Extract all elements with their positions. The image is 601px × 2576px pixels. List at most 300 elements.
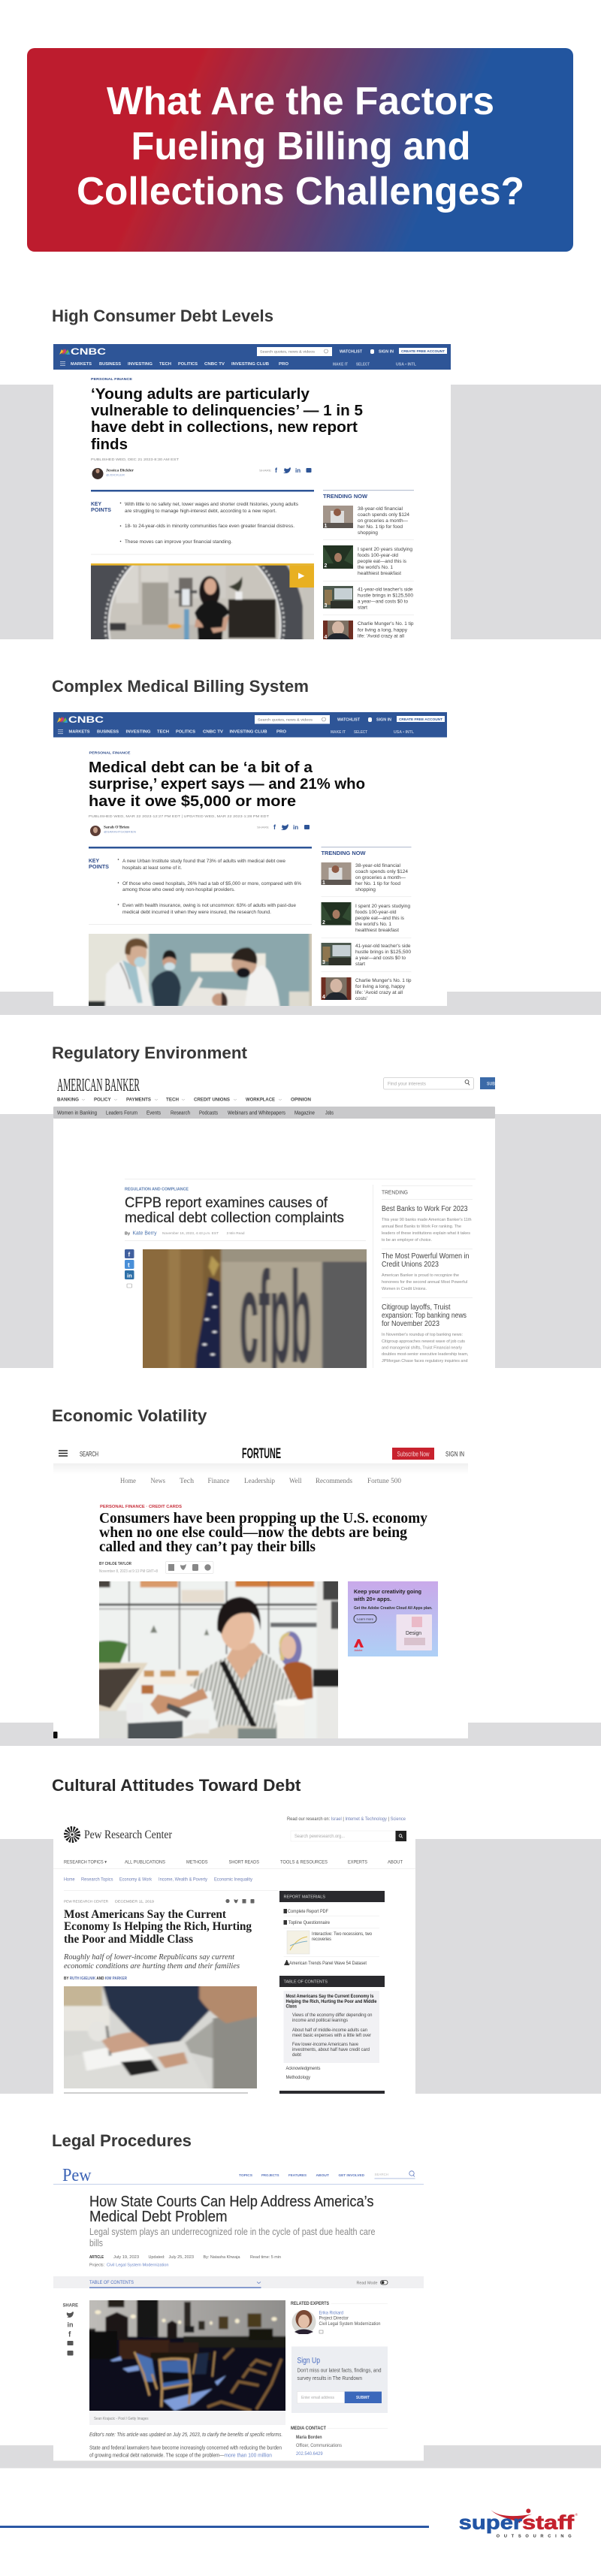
trending item 1: leaders of these institutions explain what it takes (382, 1231, 470, 1236)
trending headlines: 38-year-old financial (355, 863, 401, 868)
CNBC header bar: TECH (157, 730, 169, 735)
secondary navigation bar: Leaders Forum (106, 1110, 137, 1116)
publication date: PUBLISHED WED, MAR 22 2023·12:27 PM EDT | UPDATED WED, MAR 22 2023·1:28 PM EDT (89, 814, 270, 818)
navigation: SEARCH (374, 2173, 388, 2177)
social share buttons: in (127, 1273, 132, 1279)
sidebar: table of contents: meet basic expenses with a little left over (292, 2034, 371, 2038)
panel: American Banker article screenshot (53, 1074, 496, 1390)
trending headlines: for living a long, happy (355, 984, 406, 989)
trending thumbnails: 1 (322, 880, 325, 886)
article headline: How State Courts Can Help Address America’s (89, 2194, 374, 2210)
trending item 2: The Most Powerful Women in (382, 1252, 470, 1261)
category label: PERSONAL FINANCE (91, 377, 132, 381)
trending headlines: 41-year-old teacher's side (355, 944, 411, 949)
photo caption (89, 2411, 285, 2425)
share icons: SHARE (257, 825, 269, 829)
sidebar: table of contents: Helping the Rich, Hurting the Poor and Middle (285, 2000, 377, 2004)
Fortune navigation (120, 1477, 402, 1484)
trending headlines: Charlie Munger's No. 1 tip (358, 621, 414, 627)
Fortune top bar: SEARCH (80, 1450, 98, 1457)
trending headlines: the world's No. 1 (355, 922, 391, 927)
article meta: Civil Legal System Modernization (107, 2263, 168, 2267)
secondary navigation bar: Magazine (294, 1110, 315, 1116)
Fortune navigation: Fortune 500 (367, 1477, 402, 1484)
trending headlines: shopping (358, 530, 378, 536)
Fortune top bar: Subscribe Now (397, 1450, 430, 1457)
article headline: Medical Debt Problem (89, 2209, 227, 2225)
article meta: Updated: (149, 2255, 165, 2260)
CNBC header bar: CREATE FREE ACCOUNT (399, 717, 442, 721)
article subheading: bills (89, 2238, 103, 2248)
publication date: PUBLISHED WED, DEC 21 2023·8:30 AM EST (91, 458, 180, 461)
interactive thumbnail (287, 1931, 310, 1954)
trending headlines: hustle brings in $125,500 (358, 593, 413, 598)
panel: CNBC medical debt article screenshot (53, 712, 447, 1014)
key points: are struggling to manage high-interest debt, according to a new report. (125, 509, 276, 514)
trending thumbnails: 4 (325, 635, 328, 640)
article meta: PEW RESEARCH CENTER (64, 1899, 109, 1904)
trending item 2: honorees for the second annual Most Powerful (382, 1280, 467, 1285)
primary navigation: BANKING (57, 1097, 79, 1103)
heading: regulatory environment: Regulatory Environment (52, 1043, 248, 1062)
gray band 2 (0, 992, 601, 1015)
trending item 3: Citigroup approaches newest wave of job cuts (382, 1339, 465, 1344)
logo: SuperStaff Outsourcing: super (459, 2511, 522, 2534)
key points: medical debt incurred it when they were insured, the research found. (122, 910, 271, 915)
navigation: GET INVOLVED (338, 2173, 365, 2178)
trending headlines: the world's No. 1 (358, 565, 393, 570)
sidebar: report materials: American Trends Panel Wave 54 Dataset (289, 1961, 367, 1966)
author byline: Sarah O'Brien (104, 826, 129, 829)
secondary navigation bar: Women in Banking (57, 1110, 97, 1116)
sidebar: table of contents: debt (292, 2053, 301, 2058)
main navigation: EXPERTS (348, 1860, 368, 1865)
subscribe button (480, 1077, 496, 1089)
byline: 3 Min Read (227, 1231, 245, 1236)
key points: Of those who owed hospitals, 26% had a tab of $5,000 or more, compared with 6% (122, 881, 302, 886)
article body text: Editor's note: This article was updated on July 25, 2023, to clarify the benefits of specific reforms. (89, 2433, 282, 2438)
related experts: Erika Rickard (319, 2311, 343, 2315)
Fortune navigation: News (150, 1477, 165, 1484)
media contact: MEDIA CONTACT (291, 2426, 326, 2431)
table of contents bar: TABLE OF CONTENTS (89, 2281, 134, 2285)
trending item 3 (382, 1303, 469, 1363)
CNBC header bar: MAKE IT (331, 730, 346, 735)
trending headlines: foods 100-year-old (355, 910, 397, 915)
sidebar: table of contents: About half of middle-income adults can (292, 2028, 367, 2033)
secondary navigation bar (53, 1107, 495, 1119)
Fortune top bar (53, 1446, 468, 1474)
secondary navigation bar: Events (146, 1110, 161, 1116)
CNBC header bar: CNBC TV (203, 730, 224, 735)
article body text: more than 100 million (224, 2454, 272, 2458)
main navigation (53, 1860, 415, 1869)
Fortune navigation: Finance (207, 1477, 230, 1484)
trending item 3: JPMorgan Chase faces regulatory inquiries and (382, 1359, 467, 1363)
search box: Find your interests (388, 1082, 426, 1086)
article body text: of growing medical debt nationwide. The scope of the problem— (89, 2454, 224, 2458)
navigation: FEATURES (288, 2173, 307, 2178)
CNBC header bar: CNBC (71, 346, 106, 357)
trending headlines: start (355, 962, 365, 967)
trending now sidebar (322, 850, 412, 1001)
share column: in (68, 2321, 74, 2329)
Fortune navigation: Well (289, 1477, 302, 1484)
navigation (53, 2171, 424, 2185)
share icons (165, 1561, 213, 1573)
article headline: called and they can’t pay their bills (99, 1539, 316, 1555)
article headline: when no one else could—now the debts are being (99, 1524, 407, 1541)
social share buttons (125, 1249, 134, 1288)
trending headlines: life: 'Avoid crazy at all (358, 634, 405, 639)
author byline: Jessica Dickler (106, 469, 134, 473)
navigation: TOPICS (239, 2173, 253, 2178)
CNBC header bar (53, 344, 451, 370)
article subheading: Roughly half of lower-income Republicans say current (63, 1952, 235, 1961)
key points divider bars (89, 847, 412, 925)
expert portrait (291, 2310, 316, 2334)
panel: CNBC young adults article screenshot (53, 344, 451, 723)
title banner (27, 48, 573, 252)
trending sidebar: TRENDING (382, 1188, 408, 1196)
byline: November 8, 2023 at 9:13 PM GMT+8 (99, 1569, 158, 1574)
secondary navigation bar: Jobs (325, 1110, 334, 1116)
advertisement: Adobe: Design (406, 1631, 421, 1636)
Fortune navigation: Home (120, 1477, 136, 1484)
trending item 3: for November 2023 (382, 1319, 439, 1328)
category label: PERSONAL FINANCE · CREDIT CARDS (100, 1505, 182, 1509)
trending headlines: people eat—and this is (358, 559, 407, 564)
gray band 4 (0, 1723, 601, 1746)
trending item 1: to be an employer of choice. (382, 1238, 432, 1243)
trending thumbnails (322, 862, 352, 1000)
article subheading: Legal system plays an underrecognized role in the cycle of past due health care (89, 2227, 376, 2237)
trending item 3: and managerial shifts, Truist Financial nearly (382, 1346, 462, 1351)
byline (99, 1562, 158, 1574)
trending headlines: her No. 1 tip for food (355, 881, 400, 886)
related experts: Project Director (319, 2317, 349, 2321)
photo: CFPB sign with flag (130, 1242, 379, 1390)
Fortune top bar: SIGN IN (445, 1450, 464, 1457)
sidebar: table of contents: investments, about half have credit card (292, 2048, 370, 2052)
byline: Kate Berry (132, 1229, 157, 1237)
related experts (291, 2301, 388, 2334)
key points divider bars (91, 490, 414, 554)
trending item 3: Citigroup layoffs, Truist (382, 1303, 451, 1312)
CNBC header bar: USA • INTL (396, 362, 416, 367)
sidebar: table of contents (279, 1976, 385, 2094)
trending headlines: costs' (355, 996, 367, 1001)
CNBC header bar: MAKE IT (333, 362, 348, 367)
sidebar: table of contents: Few lower-income Americans have (292, 2043, 359, 2047)
category label: PERSONAL FINANCE (89, 751, 131, 754)
breadcrumb (64, 1877, 278, 1891)
sidebar: table of contents: TABLE OF CONTENTS (284, 1980, 328, 1985)
key points: These moves can improve your financial standing. (125, 539, 232, 545)
gray band 3 (0, 1114, 601, 1368)
trending item 2: Credit Unions 2023 (382, 1260, 439, 1269)
key points: A new Urban Institute study found that 73% of adults with medical debt owe (122, 859, 286, 864)
breadcrumb: Research Topics (81, 1877, 113, 1883)
breadcrumb: Home (64, 1877, 75, 1883)
trending headlines: foods 100-year-old (358, 553, 398, 558)
primary navigation (57, 1097, 311, 1103)
CNBC header bar: PRO (279, 362, 288, 367)
advertisement: Adobe (348, 1581, 438, 1656)
CNBC header bar: BUSINESS (99, 362, 122, 367)
logo: SuperStaff Outsourcing: ® (575, 2512, 578, 2517)
share column: f (68, 2330, 71, 2339)
main navigation: METHODS (186, 1860, 208, 1865)
advertisement: Adobe: Adobe (355, 1649, 362, 1652)
article headline (125, 1195, 344, 1226)
trending thumbnails: 4 (322, 995, 325, 1000)
sidebar: table of contents: Acknowledgments (285, 2067, 320, 2071)
trending headlines: healthiest breakfast (355, 928, 399, 933)
trending item 3: doubles most-senior executive leadership team, (382, 1352, 469, 1357)
CNBC header bar: CNBC (68, 714, 104, 725)
search box: Search pewresearch.org... (294, 1835, 345, 1839)
article subheading (63, 1952, 240, 1971)
trending headlines: coach spends only $124 (355, 869, 408, 874)
logo: SuperStaff Outsourcing: OUTSOURCING (497, 2534, 572, 2538)
title: Collections Challenges? (77, 170, 524, 213)
article headline: Medical debt can be ‘a bit of a (89, 760, 313, 776)
gray band 1 (0, 385, 601, 639)
trending headlines: 41-year-old teacher's side (358, 587, 413, 592)
author byline: @SARAHTGOBRIEN (104, 829, 136, 834)
byline: November 16, 2023, 4:43 p.m. EST (162, 1231, 219, 1236)
CNBC header bar: POLITICS (178, 362, 198, 367)
trending headlines: hustle brings in $125,500 (355, 950, 411, 955)
media contact: 202.540.6429 (296, 2452, 323, 2457)
trending headlines: on groceries a month— (355, 875, 406, 880)
sidebar: table of contents: Views of the economy differ depending on (292, 2013, 373, 2018)
sidebar: table of contents: Methodology (285, 2076, 310, 2080)
article body text (89, 2433, 282, 2458)
trending item 3: In November's roundup of top banking news: (382, 1333, 463, 1337)
CNBC header bar: INVESTING CLUB (230, 730, 267, 735)
related experts: RELATED EXPERTS (291, 2301, 329, 2306)
main navigation: SHORT READS (228, 1860, 260, 1865)
article headline (91, 386, 363, 453)
trending headlines: I spent 20 years studying (358, 547, 412, 552)
sidebar: report materials (279, 1891, 385, 1966)
article headline: have it owe $5,000 or more (89, 793, 296, 810)
article headline: ‘Young adults are particularly (91, 386, 310, 403)
CNBC header bar: CREATE FREE ACCOUNT (401, 349, 445, 353)
author byline: @JDICKLER (106, 473, 125, 476)
trending thumbnails: 3 (322, 960, 325, 965)
sign up box: Sign Up (297, 2356, 320, 2365)
article headline: medical debt collection complaints (125, 1210, 344, 1226)
logo: SuperStaff Outsourcing: staff (522, 2511, 574, 2534)
share icons: SHARE (259, 469, 271, 472)
article headline: CFPB report examines causes of (125, 1195, 328, 1211)
trending item 3: expansion: Top banking news (382, 1311, 467, 1320)
heading: high consumer debt levels: High Consumer Debt Levels (52, 307, 273, 325)
trending now sidebar: TRENDING NOW (323, 493, 367, 500)
article meta: ARTICLE (89, 2255, 104, 2260)
article headline: finds (91, 436, 128, 453)
byline: BY RUTH IGIELNIK AND KIM PARKER (64, 1977, 127, 1981)
share icons: f (273, 823, 276, 831)
breadcrumb: Economy & Work (119, 1877, 153, 1883)
article meta: By: Natasha Khwaja (203, 2255, 240, 2260)
CNBC header bar: INVESTING (126, 730, 151, 735)
article subheading (89, 2227, 376, 2248)
main navigation: RESEARCH TOPICS ▾ (64, 1860, 107, 1865)
article headline: surprise,’ expert says — and 21% who (89, 776, 365, 793)
trending thumbnails: 2 (325, 563, 328, 569)
article headline: have debt in collections, new report (91, 419, 358, 436)
article headline: vulnerable to delinquencies’ — 1 in 5 (91, 403, 363, 419)
article meta: Read time: 5 min (250, 2255, 281, 2260)
article headline (89, 2194, 374, 2225)
share icons (257, 823, 310, 831)
trending headlines: Charlie Munger's No. 1 tip (355, 978, 412, 983)
trending headlines: 38-year-old financial (358, 506, 403, 512)
trending item 1: This year 90 banks made American Banker's 11th (382, 1218, 472, 1222)
CNBC header bar: CNBC TV (204, 362, 225, 367)
byline (125, 1229, 245, 1237)
article category: REGULATION AND COMPLIANCE (125, 1187, 189, 1191)
trending headlines: a year—and costs $0 to (355, 956, 406, 961)
sidebar: table of contents: income and political leanings (292, 2019, 348, 2023)
share icons: f (275, 467, 278, 474)
related experts: Civil Legal System Modernization (319, 2322, 380, 2327)
primary navigation: TECH (166, 1097, 179, 1103)
trending headlines: healthiest breakfast (358, 571, 401, 576)
advertisement: Adobe: with 20+ apps. (353, 1596, 391, 1602)
sign up box: survey results in The Rundown (297, 2376, 362, 2381)
icon: peacock logo (57, 717, 68, 723)
photo: woman paying at cafe (90, 1572, 348, 1748)
Pew Research Center logo: Pew Research Center (84, 1829, 173, 1841)
breadcrumb: Economic Inequality (214, 1877, 253, 1883)
trending headlines: for living a long, happy (358, 628, 408, 633)
sidebar: table of contents: Most Americans Say the Current Economy Is (285, 1995, 374, 1999)
panel: American Banker article screenshot: AMERICAN BANKER (57, 1076, 140, 1095)
trending item 1 (382, 1204, 472, 1243)
media contact (291, 2426, 388, 2457)
article rule lines (125, 1179, 476, 1368)
sign up box: Don't miss our latest facts, findings, and (297, 2368, 382, 2374)
breadcrumb: Income, Wealth & Poverty (159, 1877, 208, 1883)
primary navigation: POLICY (94, 1097, 111, 1103)
trending headlines (323, 506, 414, 639)
share icons: in (295, 467, 300, 474)
panel: Pew Research Center article screenshot (50, 1807, 415, 2096)
trending headlines: people eat—and this is (355, 916, 405, 921)
media contact: Maria Borden (296, 2436, 322, 2440)
key points: KEY (91, 502, 101, 507)
byline: BY CHLOE TAYLOR (99, 1562, 131, 1566)
Fortune navigation: Recommends (316, 1477, 352, 1484)
CNBC header bar: INVESTING (128, 362, 153, 367)
CNBC header bar: SELECT (356, 362, 370, 367)
byline: By (125, 1232, 130, 1237)
primary navigation: PAYMENTS (126, 1097, 152, 1103)
trending thumbnails: 1 (325, 524, 328, 529)
trending headlines: a year—and costs $0 to (358, 599, 408, 604)
CNBC header bar: BUSINESS (97, 730, 119, 735)
primary navigation: OPINION (291, 1097, 311, 1103)
heading: complex medical billing system: Complex Medical Billing System (52, 677, 309, 696)
trending headlines: her No. 1 tip for food (358, 524, 403, 530)
search box (291, 1831, 406, 1841)
share icons (259, 467, 311, 474)
panel: Pew medical debt article screenshot (53, 2160, 424, 2461)
article meta (64, 1899, 254, 1904)
gray band 6 (0, 2445, 601, 2469)
gray band 5 (0, 1839, 601, 2094)
advertisement: Adobe: Learn more (357, 1617, 374, 1621)
sign up box: SUBMIT (356, 2396, 370, 2400)
share column: SHARE (63, 2303, 79, 2308)
trending headlines (322, 863, 412, 1001)
table of contents bar (53, 2276, 424, 2288)
icon: peacock logo (59, 349, 70, 355)
primary navigation: CREDIT UNIONS (194, 1097, 231, 1103)
heading: legal procedures: Legal Procedures (52, 2131, 192, 2150)
CNBC header bar: WATCHLIST (340, 350, 362, 355)
social share buttons: f (128, 1252, 131, 1258)
sign up box (291, 2347, 388, 2413)
trending headlines: shopping (355, 887, 376, 892)
key points (91, 502, 298, 545)
CNBC header bar: PRO (276, 730, 286, 735)
sidebar: report materials: REPORT MATERIALS (284, 1895, 325, 1899)
Fortune navigation: Tech (180, 1477, 195, 1484)
trending item 2: Women in Credit Unions. (382, 1287, 427, 1291)
key points: 18- to 24-year-olds in minority communities face even greater financial distress. (125, 524, 294, 529)
CNBC header bar: SIGN IN (379, 350, 394, 355)
author byline (90, 826, 136, 836)
trending item 1: annual Best Banks to Work For ranking. The (382, 1225, 461, 1229)
secondary navigation bar: Webinars and Whitepapers (228, 1110, 285, 1116)
advertisement: Adobe: Get the Adobe Creative Cloud All Apps plan. (354, 1606, 433, 1611)
article meta: Projects: (89, 2263, 104, 2267)
article meta: July 25, 2023 (168, 2255, 194, 2260)
main navigation: ABOUT (388, 1860, 403, 1865)
trending item 2 (382, 1252, 470, 1291)
sign up box: Enter email address (301, 2396, 334, 2400)
article headline: the Poor and Middle Class (64, 1933, 193, 1946)
sidebar: table of contents: Class (285, 2004, 297, 2009)
CNBC header bar: Search quotes, news & videos (258, 718, 313, 721)
CNBC header bar: Search quotes, news & videos (260, 350, 316, 353)
CNBC header bar (53, 712, 447, 738)
author byline (92, 468, 134, 479)
title: Fueling Billing and (131, 125, 470, 168)
search box (383, 1077, 473, 1089)
secondary navigation bar: Research (171, 1110, 190, 1116)
article headline (64, 1908, 252, 1946)
photo: doctors and patient (81, 926, 319, 1014)
panel: Fortune article screenshot (53, 1439, 468, 1748)
CNBC header bar: INVESTING CLUB (231, 362, 269, 367)
article body text: State and federal lawmakers have become increasingly concerned with reducing the burden (89, 2446, 282, 2451)
CNBC header bar: MARKETS (71, 362, 92, 367)
trending headlines: life: 'Avoid crazy at all (355, 990, 403, 995)
navigation: ABOUT (316, 2173, 329, 2178)
main navigation: ALL PUBLICATIONS (125, 1860, 166, 1865)
CNBC header bar: SELECT (354, 730, 367, 735)
CNBC header bar: TECH (159, 362, 171, 367)
heading: cultural attitudes toward debt: Cultural Attitudes Toward Debt (52, 1776, 301, 1795)
article meta: July 19, 2023 (113, 2255, 139, 2260)
